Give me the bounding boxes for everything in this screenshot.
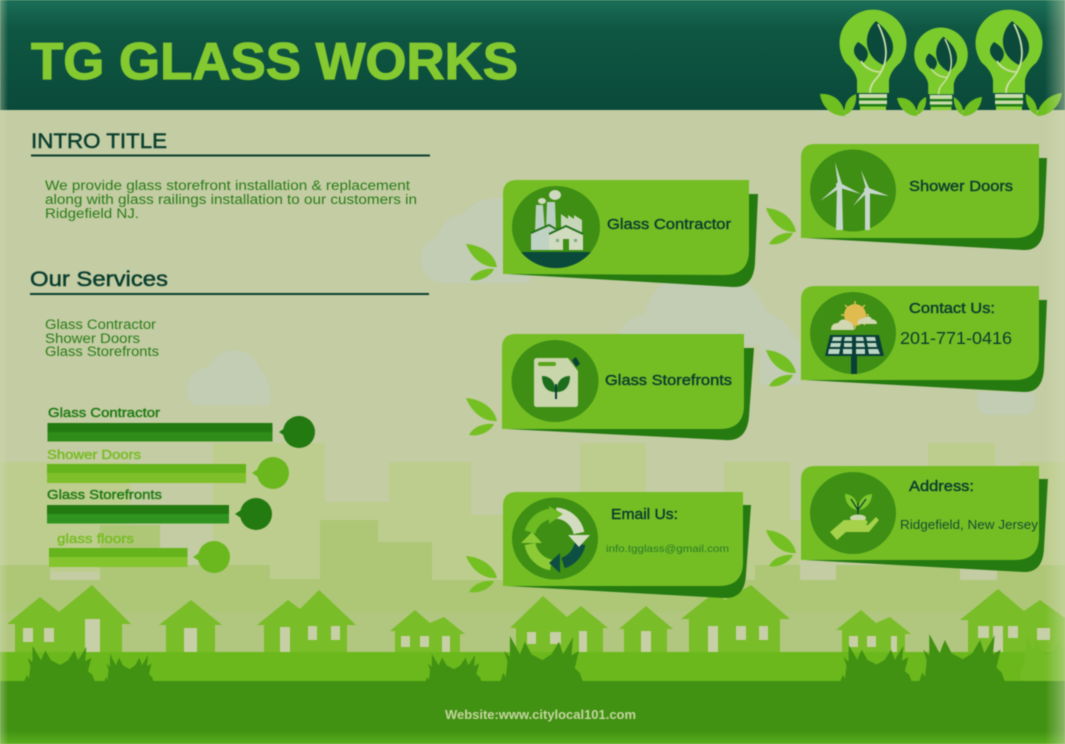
label: Glass Contractor <box>607 217 731 233</box>
label: Email Us: <box>611 507 678 523</box>
houses <box>7 585 1065 653</box>
text block: intro: Ridgefield NJ. <box>45 206 139 221</box>
label: Shower Doors <box>909 179 1013 195</box>
heading: our services: Our Services <box>30 268 168 291</box>
bar: glass floors <box>49 531 230 573</box>
bar: glass contractor <box>48 405 315 448</box>
bar: shower doors: Shower Doors <box>47 447 142 462</box>
title: TG GLASS WORKS <box>31 33 518 91</box>
ground <box>0 652 1065 744</box>
email address: info.tgglass@gmail.com <box>606 543 729 555</box>
text block: services list: Glass Storefronts <box>45 344 159 359</box>
house windows and doors <box>23 619 1050 653</box>
bar chart <box>47 405 315 573</box>
bar: glass contractor: Glass Contractor <box>48 405 161 420</box>
panel: glass contractor <box>503 180 758 287</box>
text block: intro: along with glass railings installation to our customers in <box>45 192 417 207</box>
label: Glass Storefronts <box>605 373 732 389</box>
icon: recycle arrows <box>521 506 590 573</box>
panel: glass storefronts <box>502 334 754 440</box>
bar: glass floors: glass floors <box>57 531 135 546</box>
icon: hand with sprout <box>830 494 879 540</box>
bar: glass storefronts <box>47 487 272 530</box>
text block: services list <box>45 317 159 359</box>
icon: factory <box>521 190 591 268</box>
grass tufts <box>24 634 1065 683</box>
bar: shower doors <box>47 447 289 489</box>
header band <box>0 0 1065 110</box>
label: Contact Us: <box>909 301 995 317</box>
bar: glass storefronts: Glass Storefronts <box>47 487 163 502</box>
icon: light bulb one <box>840 10 906 110</box>
address text: Ridgefield, New Jersey <box>900 518 1039 532</box>
text block: intro <box>45 178 417 221</box>
label: Address: <box>909 479 974 495</box>
heading: intro title: INTRO TITLE <box>31 130 167 153</box>
icon: wind turbines <box>820 162 889 230</box>
panel: address <box>801 466 1048 572</box>
icon: bulb base leaves <box>820 93 1062 116</box>
footer website: Website:www.citylocal101.com <box>445 708 636 722</box>
text block: services list: Shower Doors <box>45 331 140 346</box>
panel: contact us <box>801 286 1047 392</box>
side leaves <box>466 208 796 592</box>
icon: solar panel <box>825 301 884 374</box>
clouds <box>187 198 1035 415</box>
panel: shower doors <box>801 144 1047 250</box>
phone number: 201-771-0416 <box>900 328 1012 348</box>
icon: fuel can <box>534 357 580 407</box>
icon: light bulb two <box>914 28 968 110</box>
text block: services list: Glass Contractor <box>45 317 157 332</box>
text block: intro: We provide glass storefront installation & replacement <box>45 178 410 193</box>
icon: light bulb three <box>976 10 1042 110</box>
panel: email us <box>503 492 751 598</box>
